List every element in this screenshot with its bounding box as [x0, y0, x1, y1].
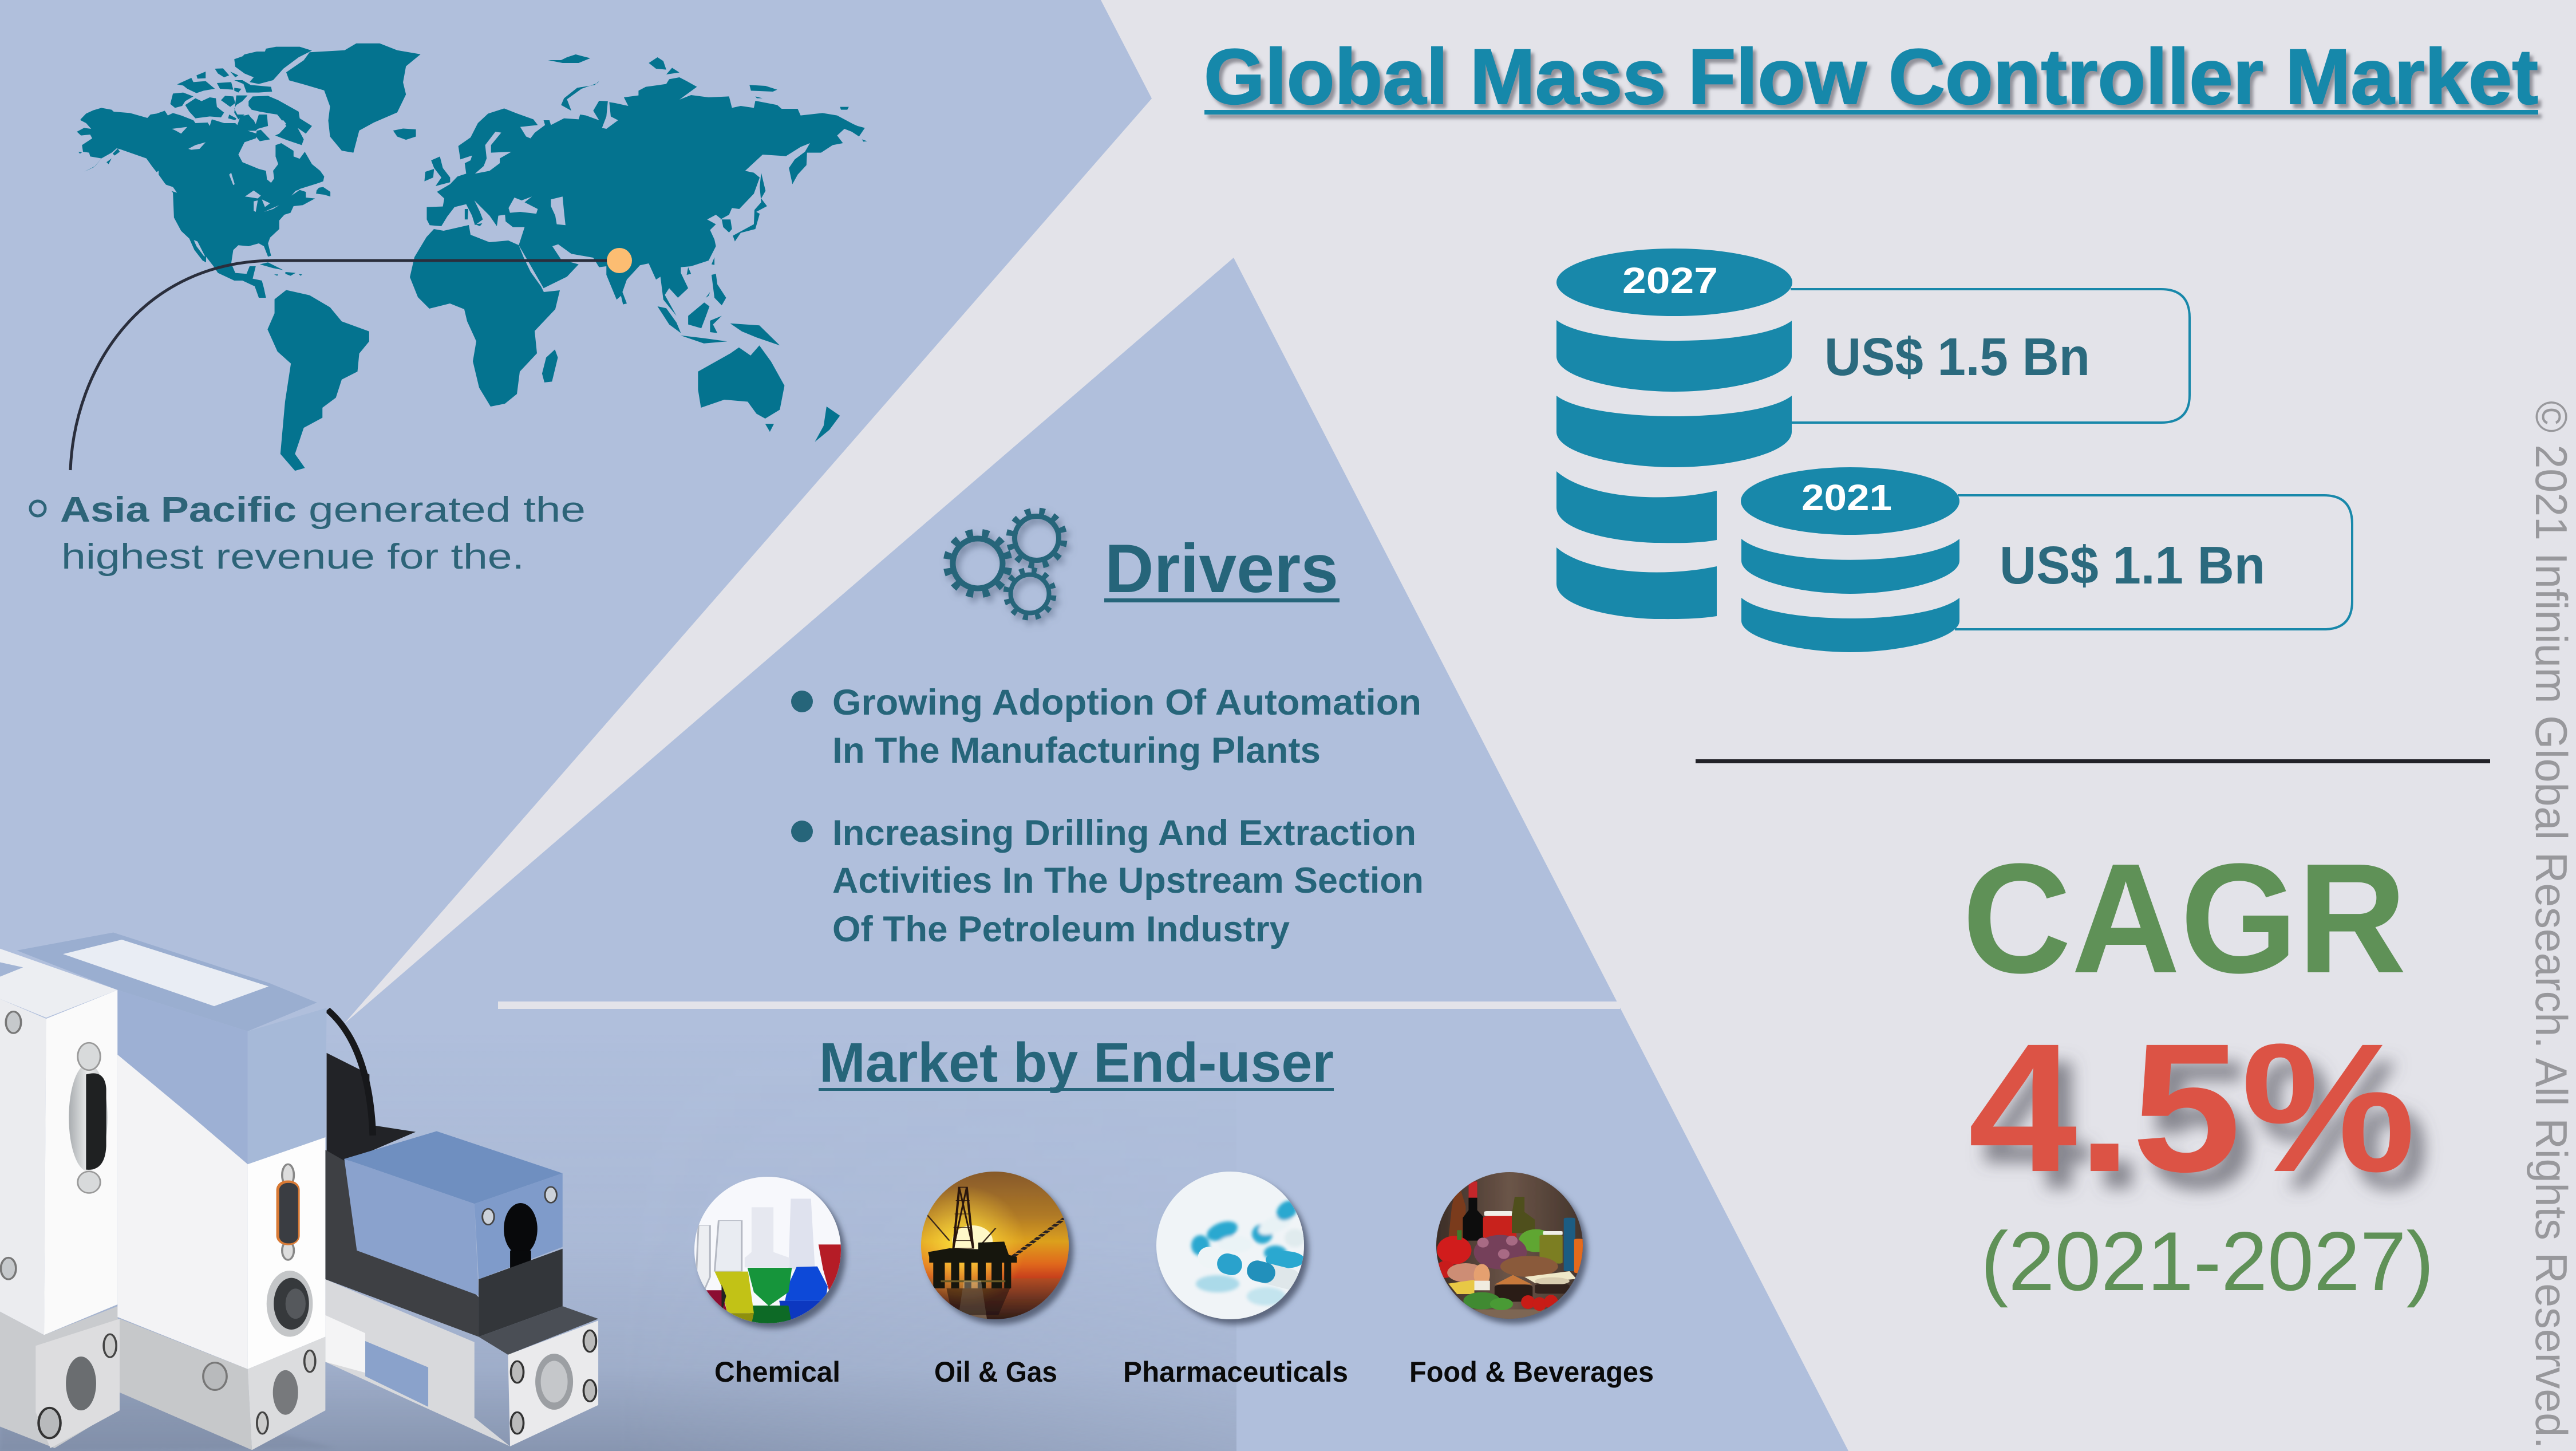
end-user icon: chemical — [693, 1174, 843, 1324]
value box: 2021 — [1955, 495, 2352, 629]
CAGR value: 4.5% — [1968, 1005, 2416, 1210]
device 3 rear block and cable — [325, 1010, 598, 1446]
value box: 2027 — [1791, 289, 2190, 423]
database stack: 2021: 2021 — [1801, 477, 1892, 518]
product photo: mass flow controllers — [0, 932, 598, 1451]
map: North America and Arctic Canada — [77, 47, 330, 298]
divider line — [1696, 759, 2490, 763]
device 1 — [0, 949, 120, 1448]
map marker: Asia Pacific — [607, 248, 632, 273]
database stack: 2021 — [1741, 467, 1959, 652]
bottom shading behind product photo — [0, 1258, 1236, 1451]
text: Asia Pacific statement: generated the — [309, 490, 586, 530]
driver bullet 1: In The Manufacturing Plants — [832, 731, 1321, 771]
driver bullet 2 — [791, 813, 1424, 949]
text: Asia Pacific statement: highest revenue for the. — [61, 537, 524, 577]
driver bullet 2: Of The Petroleum Industry — [832, 909, 1290, 949]
database stack: 2027: 2027 — [1622, 260, 1718, 301]
driver bullet 1: Growing Adoption Of Automation — [832, 683, 1421, 723]
driver bullet 2: Activities In The Upstream Section — [832, 861, 1424, 901]
icon: gears — [943, 508, 1066, 619]
heading: Market by End-user: Market by End-user — [819, 1031, 1334, 1094]
device 2 — [17, 932, 327, 1450]
map: Eurasia and Asian islands — [424, 54, 867, 333]
world map — [77, 44, 867, 471]
end-user icon: oil and gas — [919, 1171, 1071, 1321]
map: Africa — [410, 225, 560, 407]
CAGR label: CAGR — [1962, 831, 2407, 1006]
driver bullet 2: Increasing Drilling And Extraction — [832, 813, 1416, 853]
label: Food & Beverages: Food & Beverages — [1409, 1356, 1654, 1388]
background panel: blue wedge and triangle — [0, 0, 1848, 1451]
label: Chemical: Chemical — [714, 1356, 840, 1388]
driver bullet 1 — [791, 683, 1421, 771]
title: Global Mass Flow Controller Market — [1204, 33, 2538, 121]
blurred capsules — [1191, 1197, 1305, 1306]
text: Asia Pacific statement: Asia Pacific — [60, 490, 297, 530]
end-user icon: food and beverages — [1434, 1171, 1585, 1321]
value box: 2021: US$ 1.1 Bn — [2000, 535, 2265, 595]
database stack: 2027 — [1556, 249, 1792, 619]
CAGR period: (2021-2027) — [1981, 1215, 2434, 1308]
leader line from Asia Pacific — [70, 261, 610, 470]
heading: Drivers: Drivers — [1105, 530, 1338, 607]
label: Pharmaceuticals: Pharmaceuticals — [1123, 1356, 1348, 1388]
text: Asia Pacific statement — [30, 490, 586, 577]
value box: 2027: US$ 1.5 Bn — [1824, 327, 2090, 387]
label: Oil & Gas: Oil & Gas — [934, 1356, 1057, 1388]
end-user icon: pharmaceuticals — [1155, 1171, 1305, 1321]
map: Greenland, South America, Australia and southern islands — [267, 44, 840, 471]
